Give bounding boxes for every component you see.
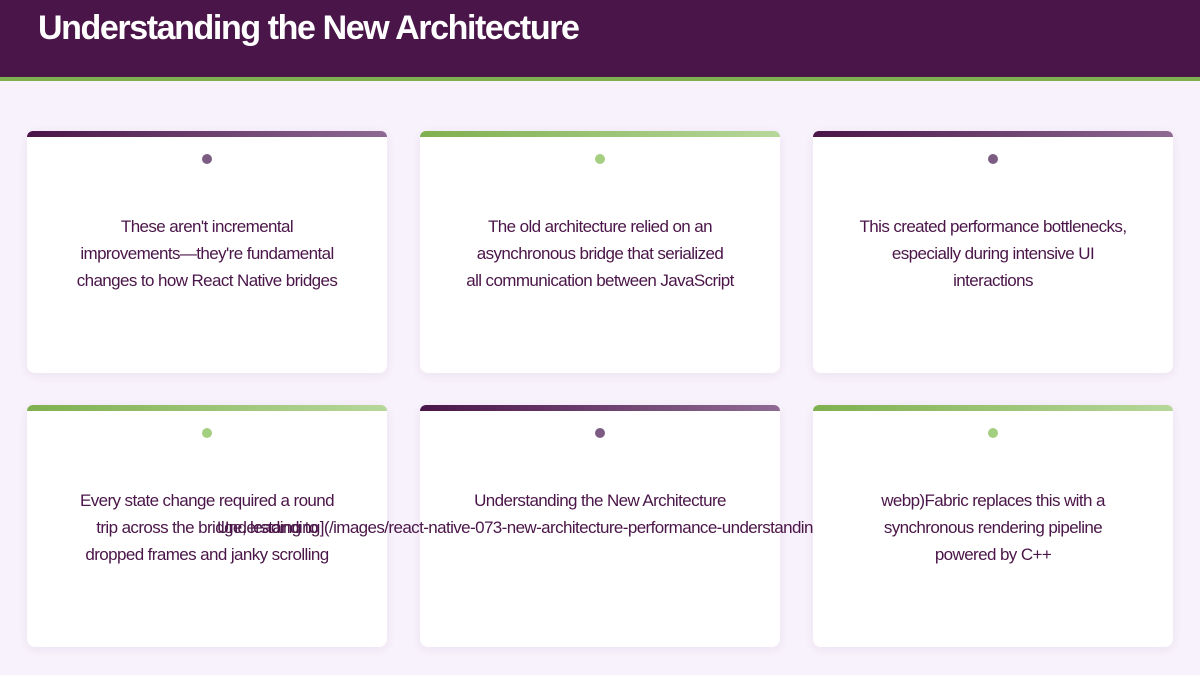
card 2 text: asynchronous bridge that serialized <box>477 244 723 263</box>
card 2 <box>420 131 780 373</box>
card 6 text: webp)Fabric replaces this with a <box>881 491 1105 510</box>
card 1 text: improvements—they're fundamental <box>80 244 334 263</box>
card 1 text <box>77 217 338 290</box>
card 2 text: all communication between JavaScript <box>466 271 734 290</box>
card 2 text <box>466 217 734 290</box>
card 6 text <box>881 491 1106 564</box>
card 2 text: The old architecture relied on an <box>488 217 712 236</box>
card 5 overflow path text: Understanding](/images/react-native-073-new-architecture-performance-understanding-the-new <box>217 518 883 537</box>
card 5 <box>420 405 780 647</box>
card 3 text: especially during intensive UI <box>892 244 1094 263</box>
card 1 <box>27 131 387 373</box>
card 5 text: Understanding the New Architecture <box>474 491 726 510</box>
card 4 text: Every state change required a round <box>80 491 334 510</box>
card 1 text: changes to how React Native bridges <box>77 271 337 290</box>
card 4 <box>27 405 387 647</box>
card 4 text <box>80 491 334 564</box>
card 6 text: synchronous rendering pipeline <box>884 518 1102 537</box>
title: Understanding the New Architecture <box>38 9 579 47</box>
card 3 text: interactions <box>953 271 1033 290</box>
card 3 <box>813 131 1173 373</box>
card 4 text: dropped frames and janky scrolling <box>85 545 329 564</box>
card 4 text: trip across the bridge, leading to <box>96 518 318 537</box>
card 6 text: powered by C++ <box>935 545 1051 564</box>
card 3 text <box>860 217 1126 290</box>
card 3 text: This created performance bottlenecks, <box>860 217 1126 236</box>
header <box>0 0 1200 81</box>
card 1 text: These aren't incremental <box>121 217 293 236</box>
card 6 <box>813 405 1173 647</box>
